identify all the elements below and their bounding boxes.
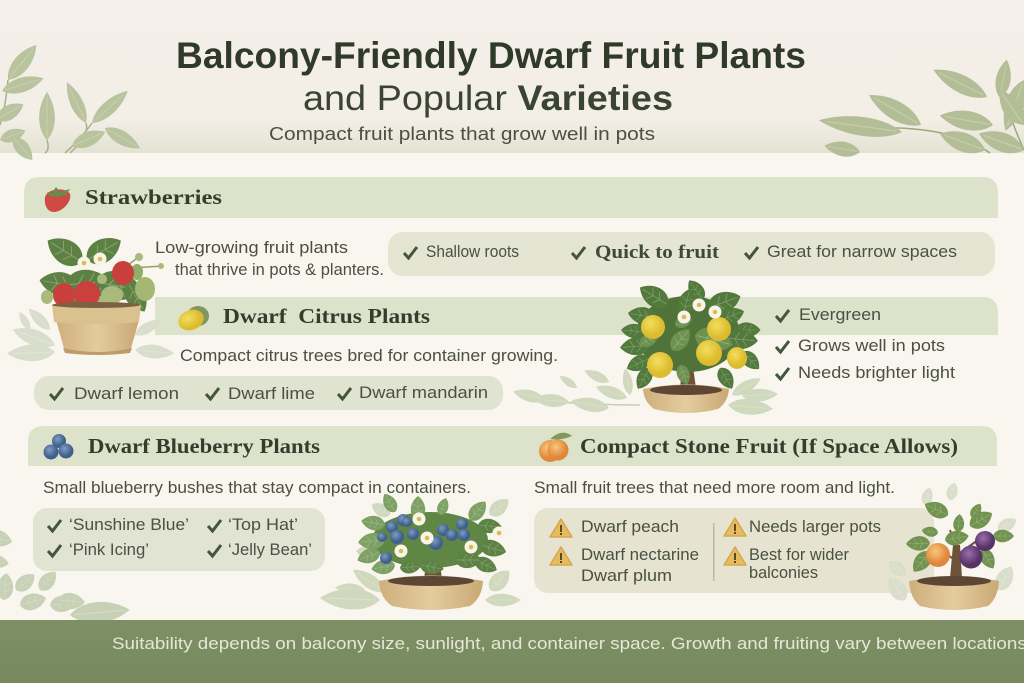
strawberries traits pill: Great for narrow spaces	[767, 243, 957, 261]
stone fruit cautions pill	[534, 508, 934, 593]
subtitle: Compact fruit plants that grow well in pots	[269, 123, 655, 144]
stone fruit cautions pill: Dwarf nectarine	[581, 546, 699, 564]
stone fruit description: Small fruit trees that need more room and light.	[534, 479, 895, 497]
citrus header ribbon	[155, 297, 998, 335]
icon: strawberry	[45, 187, 70, 212]
title	[176, 35, 806, 118]
stone fruit cautions pill: Dwarf peach	[581, 518, 679, 536]
citrus traits list: Needs brighter light	[798, 364, 955, 382]
citrus traits list	[776, 306, 955, 382]
icon: lemon	[175, 306, 209, 334]
blueberry heading: Dwarf Blueberry Plants	[88, 434, 320, 458]
citrus varieties pill: Dwarf lime	[228, 385, 315, 403]
stone fruit cautions pill: Dwarf plum	[581, 567, 672, 585]
panel: blueberry	[28, 426, 997, 571]
stone fruit cautions pill: Needs larger pots	[749, 518, 881, 536]
citrus description: Compact citrus trees bred for container growing.	[180, 347, 558, 365]
strawberries description	[155, 239, 384, 279]
panel: strawberries	[24, 177, 998, 279]
panel: stone fruit	[534, 433, 958, 593]
blueberry varieties pill: ‘Pink Icing’	[69, 541, 149, 559]
footer band	[0, 620, 1024, 683]
strawberries description: that thrive in pots & planters.	[175, 261, 384, 279]
strawberries description: Low-growing fruit plants	[155, 239, 348, 257]
header band	[0, 0, 1024, 164]
icon: peach	[539, 433, 572, 462]
footer note: Suitability depends on balcony size, sunlight, and container space. Growth and fruiting vary between locations.	[112, 634, 1024, 653]
blueberry varieties pill: ‘Jelly Bean’	[228, 541, 312, 559]
plant: lemon tree	[512, 276, 778, 417]
citrus varieties pill: Dwarf lemon	[74, 385, 179, 403]
citrus traits list: Grows well in pots	[798, 337, 945, 355]
blueberry varieties pill: ‘Top Hat’	[228, 516, 298, 534]
title: and Popular Varieties	[303, 79, 673, 118]
plant: blueberry bush	[320, 491, 521, 610]
icon: blueberries	[44, 434, 74, 460]
strawberries header ribbon	[24, 177, 998, 218]
right header foliage	[818, 58, 1024, 159]
plant: strawberry pot	[7, 230, 174, 362]
left header foliage	[0, 40, 143, 164]
panel: citrus	[34, 297, 998, 410]
citrus traits list: Evergreen	[799, 306, 881, 324]
shared lower header ribbon	[28, 426, 997, 466]
citrus heading: Dwarf Citrus Plants	[223, 304, 430, 328]
blueberry description: Small blueberry bushes that stay compact in containers.	[43, 479, 471, 497]
blueberry varieties pill	[33, 508, 325, 571]
stone fruit cautions pill: balconies	[749, 564, 818, 582]
plant: stone fruit tree	[883, 481, 1019, 610]
title: Balcony-Friendly Dwarf Fruit Plants	[176, 35, 806, 76]
strawberries traits pill: Quick to fruit	[595, 242, 720, 263]
strawberries heading: Strawberries	[85, 185, 222, 209]
strawberries traits pill: Shallow roots	[426, 243, 519, 261]
citrus varieties pill: Dwarf mandarin	[359, 384, 488, 402]
stone fruit heading: Compact Stone Fruit (If Space Allows)	[580, 434, 958, 458]
stone fruit cautions pill: Best for wider	[749, 546, 849, 564]
citrus varieties pill	[34, 376, 503, 410]
lower-left foliage	[0, 527, 131, 625]
blueberry varieties pill: ‘Sunshine Blue’	[69, 516, 189, 534]
strawberries traits pill	[388, 232, 995, 276]
